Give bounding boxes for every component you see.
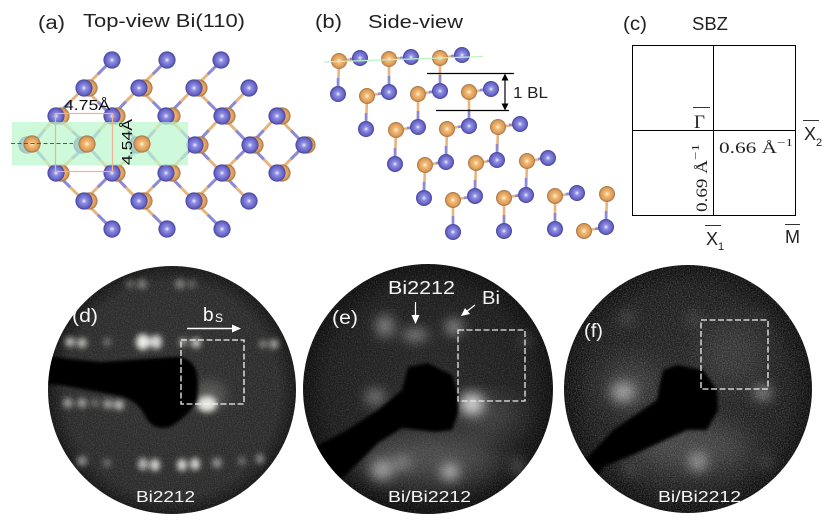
panel a heading: Top-view Bi(110) <box>83 11 245 31</box>
Bi2212 spot label: Bi2212 <box>388 278 455 298</box>
panel c heading <box>623 14 728 35</box>
zone box <box>632 45 796 216</box>
panel a heading: (a) <box>38 13 65 34</box>
dashed zone e <box>458 330 525 401</box>
M label: M <box>785 227 800 247</box>
X1 label <box>705 226 724 253</box>
X2 label: 2 <box>816 137 822 149</box>
diffraction spots d <box>63 279 278 471</box>
sample label e: Bi/Bi2212 <box>388 489 471 506</box>
beam shadow e <box>316 362 460 480</box>
Bi spot label: Bi <box>482 288 500 308</box>
screen label e: (e) <box>332 308 358 329</box>
LEED screen d <box>44 264 298 516</box>
unit cell rectangle <box>56 114 112 172</box>
panel c: surface Brillouin zone <box>623 14 822 253</box>
dashed zone d <box>181 340 244 404</box>
bilayer bracket and arrow <box>427 74 514 110</box>
screen label f: (f) <box>584 321 603 342</box>
bilayer label: 1 BL <box>513 85 548 102</box>
noise f <box>563 264 813 514</box>
LEED screen f <box>550 263 814 515</box>
orange atoms on the cut plane <box>23 135 151 153</box>
side-view bonds <box>338 55 607 232</box>
ky extent: 0.69 Å <box>694 159 711 212</box>
panel e: LEED of Bi/Bi2212 <box>290 262 555 516</box>
panel b heading: (b) <box>315 12 342 33</box>
noise d <box>47 265 297 515</box>
dashed zone f <box>701 320 768 389</box>
green cut line <box>324 56 483 62</box>
panel b heading <box>315 12 464 33</box>
reciprocal vector bs: S <box>215 311 223 325</box>
lattice bonds <box>32 60 305 229</box>
side-view orange atoms <box>331 50 615 239</box>
arrow to Bi spot <box>461 305 475 316</box>
kx extent: 0.66 Å <box>719 140 778 157</box>
diffraction spots e <box>356 315 532 480</box>
ky extent: −1 <box>690 144 702 160</box>
X1 label: X <box>706 229 718 249</box>
green cut-plane band <box>12 122 188 166</box>
panel c heading: (c) <box>623 14 647 35</box>
panel a: top-view Bi(110) <box>11 11 316 238</box>
lattice constant 4.75: 4.75Å <box>64 97 110 114</box>
X2 label <box>803 120 822 149</box>
reciprocal vector bs <box>187 305 241 332</box>
side-view blue atoms <box>330 47 614 240</box>
noise e <box>303 264 553 514</box>
diffraction spots f <box>600 313 772 474</box>
Gamma label <box>693 108 710 133</box>
panel b: side-view <box>315 12 615 240</box>
beam shadow f <box>584 364 720 476</box>
panel a heading <box>38 11 245 34</box>
reciprocal vector bs: b <box>203 305 214 326</box>
panel c heading: SBZ <box>692 14 728 34</box>
screen label d: (d) <box>72 306 98 327</box>
panel d: LEED of Bi2212 <box>44 264 298 516</box>
X2 label: X <box>804 124 816 144</box>
panel f: LEED of Bi/Bi2212 <box>550 263 814 515</box>
blue atoms of the upper layer <box>18 51 313 238</box>
kx extent: −1 <box>777 137 793 149</box>
LEED screen e <box>290 262 555 516</box>
orange atoms of the lower layer <box>52 79 316 210</box>
panel b heading: Side-view <box>368 12 464 32</box>
beam shadow d <box>44 356 198 428</box>
sample label f: Bi/Bi2212 <box>658 489 741 506</box>
sample label d: Bi2212 <box>136 489 195 506</box>
red dashed cut line <box>11 142 73 144</box>
lattice constant 4.54: 4.54Å <box>119 119 136 165</box>
Gamma label: Γ <box>694 112 705 133</box>
kx extent <box>719 137 793 157</box>
X1 label: 1 <box>718 241 724 253</box>
ky extent <box>690 144 711 212</box>
arrow to Bi2212 spot <box>412 302 420 324</box>
